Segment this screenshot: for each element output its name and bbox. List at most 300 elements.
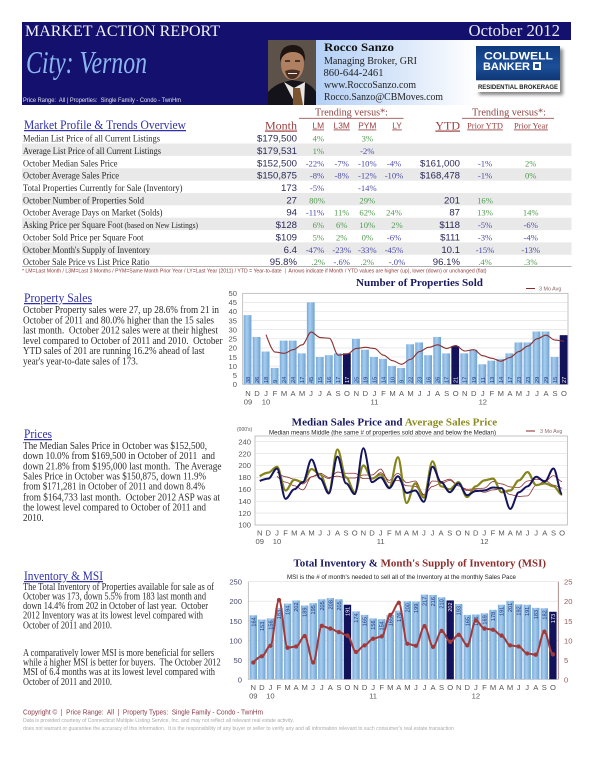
row: months supply: October Month's Supply of Inventory — [23, 245, 150, 256]
y axis labels — [238, 437, 251, 530]
legend: 3 month average — [526, 286, 561, 292]
row: months supply: -33% — [358, 245, 377, 255]
row: days on market: 24% — [386, 208, 402, 218]
body text: October of 2011 and 2010. — [23, 677, 112, 688]
column headers: Trending versus*: — [315, 108, 388, 118]
bar value labels: 21 — [454, 377, 460, 383]
row: median sales price: $161,000 — [420, 158, 460, 169]
price range note: Price Range: All | Properties: Single Family - Condo - TwnHm — [23, 98, 181, 104]
panel: market profile table — [22, 108, 572, 274]
y axis labels: 45 — [229, 298, 237, 307]
bar value labels: 178 — [491, 612, 497, 621]
row: days on market — [23, 208, 539, 219]
row: asking price per square foot: 2% — [391, 220, 403, 230]
x axis labels — [249, 683, 556, 700]
body text: last month. October 2012 sales were at their highest — [23, 326, 218, 336]
row: asking price per square foot: $128 — [276, 220, 297, 231]
bars — [243, 302, 568, 384]
column headers: LM — [312, 120, 324, 130]
x axis labels: 09 — [244, 398, 252, 406]
bar value labels: 165 — [363, 617, 369, 626]
row: inventory — [23, 183, 377, 194]
x axis labels: 11 — [377, 537, 385, 546]
icon: Coldwell Banker logo — [476, 46, 563, 95]
row: months supply: -23% — [332, 245, 351, 255]
row: asking price per square foot: $118 — [439, 220, 460, 231]
row: asking price per square foot: 6% — [336, 220, 347, 230]
row: sold price per square foot: $109 — [276, 232, 297, 243]
icon: Coldwell Banker logo: BANKER — [483, 61, 530, 73]
icon: Coldwell Banker logo: COLDWELL — [484, 50, 553, 62]
row: properties sold: October Number of Properties Sold — [23, 195, 144, 206]
row: average sales price: $150,875 — [257, 171, 297, 182]
bar value labels: 29 — [535, 377, 541, 383]
body text: The Median Sales Price in October was $152,500, — [23, 441, 207, 452]
bar value labels: 17 — [336, 377, 342, 383]
bar value labels: 19 — [363, 377, 369, 383]
y axis labels: 10 — [229, 362, 237, 371]
bar value labels: 26 — [436, 377, 442, 383]
x axis labels: 12 — [472, 692, 480, 700]
report date: October 2012 — [468, 21, 560, 40]
row: average list price: $179,531 — [257, 146, 297, 157]
row: months supply: -45% — [385, 245, 403, 255]
bar value labels: 165 — [465, 617, 471, 626]
line chart: median and average sales price — [237, 418, 567, 546]
bar value labels: 26 — [255, 377, 261, 383]
y axis labels: 200 — [238, 461, 251, 470]
bar value labels: 17 — [445, 377, 451, 383]
bar value labels: 205 — [337, 601, 343, 611]
line: months supply of inventory — [251, 598, 555, 665]
bar value labels: 189 — [303, 608, 309, 617]
y axis labels: 120 — [238, 509, 251, 518]
bar value labels: 23 — [517, 377, 523, 383]
y axis labels — [229, 289, 237, 389]
bar value labels: 23 — [526, 377, 532, 383]
bar value labels: 191 — [525, 607, 531, 616]
x axis labels — [255, 528, 565, 546]
row: properties sold: 80% — [309, 195, 325, 205]
bar value labels: 164 — [251, 617, 257, 627]
bar value labels: 11 — [481, 377, 487, 383]
column headers: Month — [265, 118, 297, 132]
bar value labels: 191 — [346, 607, 352, 616]
row: inventory: Total Properties Currently for Sale (Inventory) — [23, 183, 182, 194]
y axis labels: 140 — [238, 497, 251, 506]
row: sale vs list ratio — [23, 257, 538, 268]
row: days on market: 94 — [286, 208, 298, 219]
row: months supply — [23, 245, 540, 256]
row: sold price per square foot: -6% — [387, 232, 401, 242]
x axis labels: 11 — [370, 398, 378, 406]
title: MARKET ACTION REPORT — [25, 23, 220, 40]
right y axis labels: 20 — [564, 597, 572, 606]
bar value labels: 156 — [268, 620, 274, 630]
body text: The Total Inventory of Properties available for sale as of — [23, 582, 215, 593]
line: average 3 month average — [277, 472, 562, 495]
row: days on market: 11% — [334, 208, 349, 218]
right y axis labels — [564, 578, 572, 684]
table footnote: * LM=Last Month / L3M=Last 3 Months / PYM=Same Month Prior Year / LY=Last Year (2011) / YTD = Year-to-date | Arrows indicate if Month / YTD values are higher (up), lower (down) or unchanged (flat) — [22, 268, 487, 274]
panel: prices text — [23, 427, 222, 524]
row: median sales price: 2% — [525, 158, 536, 168]
left y axis labels: 200 — [229, 597, 242, 606]
row: sold price per square foot: October Sold Price per Square Foot — [23, 232, 144, 243]
row: median sales price: -4% — [387, 158, 401, 168]
y axis labels: 5 — [233, 371, 237, 380]
body text: 2010. — [23, 513, 44, 524]
column headers: LY — [392, 120, 402, 130]
y axis labels: 50 — [229, 289, 237, 298]
right y axis labels: 10 — [564, 636, 572, 645]
chart title: Total Inventory & Month's Supply of Inventory (MSI) — [294, 558, 547, 570]
disclaimer line two: does not warrant or guarantee the accuracy of this information. It is the responsibility of any buyer or seller to verify any and all information relevant to such consumer's real estate transaction — [23, 726, 454, 732]
body text: October Property sales were 27, up 28.6% from 21 in — [23, 305, 219, 316]
bar value labels: 13 — [490, 377, 496, 383]
y axis labels: 25 — [229, 335, 237, 344]
x axis labels: NDJFMAMJJASONDJFMAMJJASONDJFMAMJJASO — [257, 528, 565, 538]
bar value labels: 217 — [422, 597, 428, 606]
bar value labels: 17 — [345, 377, 351, 383]
x axis labels: 12 — [480, 537, 489, 546]
chart title: Number of Properties Sold — [356, 278, 483, 289]
x axis labels: 11 — [369, 692, 377, 700]
bar value labels: 17 — [300, 377, 306, 383]
row: sale vs list ratio: .4% — [478, 257, 492, 267]
bar value labels: 15 — [318, 377, 324, 383]
bar value labels: 173 — [551, 614, 557, 623]
row: average sales price: -1% — [478, 171, 492, 181]
body text — [23, 582, 221, 688]
bar value labels: 183 — [277, 610, 283, 619]
row: average sales price: $168,478 — [420, 171, 460, 182]
bar value labels: 193 — [457, 606, 463, 615]
row: sold price per square foot: $111 — [440, 232, 460, 243]
row: sold price per square foot: -4% — [524, 232, 538, 242]
bar value labels: 195 — [311, 605, 317, 615]
bar value labels: 9 — [400, 380, 406, 383]
row: asking price per square foot: -5% — [478, 220, 492, 230]
bar value labels: 15 — [553, 377, 559, 383]
body text: MSI of 6.4 months was at its lowest level compared with — [23, 667, 215, 678]
row: months supply: 6.4 — [284, 245, 298, 256]
body text: level compared to October of 2011 and 2010. October — [23, 336, 223, 347]
row: median sales price: $152,500 — [257, 158, 297, 169]
column headers: Trending versus*: — [472, 108, 546, 118]
bar value labels: 191 — [500, 607, 506, 616]
bar value labels: 210 — [440, 599, 446, 609]
bar value labels: 176 — [397, 613, 403, 622]
y axis labels: 0 — [233, 380, 237, 389]
row: asking price per square foot: 10% — [359, 220, 375, 230]
x axis labels: 09 — [249, 692, 258, 700]
row: median list price: $179,500 — [257, 134, 297, 144]
row: properties sold: 16% — [477, 195, 493, 205]
combo chart: inventory and months supply — [229, 558, 572, 700]
row: sold price per square foot: 5% — [313, 232, 324, 242]
body text: 2012 Inventory was at its lowest level compared with — [23, 611, 203, 622]
right y axis labels: 15 — [564, 617, 572, 626]
bar value labels: 192 — [517, 606, 523, 616]
bar value labels: 182 — [542, 610, 548, 620]
legend: 3 month average: 3 Mo Avg — [540, 429, 562, 435]
line: median 3 month average — [277, 469, 562, 496]
row: median sales price: -10% — [358, 158, 377, 168]
bar value labels: 201 — [508, 603, 514, 612]
row: sold price per square foot: 2% — [336, 232, 347, 242]
bar value labels: 38 — [246, 377, 252, 383]
bar value labels: 16 — [327, 377, 333, 383]
bar value labels: 17 — [508, 377, 514, 383]
row: sale vs list ratio: .2% — [360, 257, 374, 267]
legend: 3 month average — [526, 429, 562, 435]
left y axis labels: 0 — [238, 675, 242, 684]
row: median sales price: -22% — [306, 158, 324, 168]
bar value labels: 25 — [354, 377, 360, 383]
row: asking price per square foot — [23, 220, 538, 231]
row: inventory: 173 — [281, 183, 297, 194]
icon: Coldwell Banker logo: RESIDENTIAL BROKERAGE — [478, 84, 558, 91]
body text — [23, 441, 222, 524]
y axis labels: 40 — [229, 307, 237, 316]
left y axis labels — [229, 578, 242, 684]
legend: 3 month average: 3 Mo Avg — [539, 286, 561, 292]
disclaimer line one: Data is provided courtesy of Connecticut Multiple Listing Service, Inc. and may not reflect all relevant real estate activity. — [23, 718, 294, 724]
row: average sales price: October Average Sales Price — [23, 171, 120, 182]
heading: Prices — [24, 427, 52, 441]
agent photo — [268, 40, 316, 105]
y axis labels: 180 — [238, 473, 251, 482]
row: median list price: 4% — [313, 134, 324, 144]
row: sale vs list ratio: .2% — [311, 257, 325, 267]
column headers: Prior YTD — [467, 122, 503, 130]
x axis labels: 09 — [255, 537, 264, 546]
column headers: YTD — [435, 118, 460, 132]
bar value labels: 23 — [418, 377, 424, 383]
footer — [23, 708, 454, 732]
row: sold price per square foot: 0% — [362, 232, 373, 242]
row: days on market: 87 — [449, 208, 460, 219]
right y axis labels: 25 — [564, 578, 572, 587]
body text: down 14.4% from 202 in October of last year. October — [23, 601, 208, 612]
row: inventory: -5% — [310, 183, 324, 193]
row: days on market: 14% — [523, 208, 539, 218]
chart subtitle: MSI is the # of month's needed to sell all of the Inventory at the monthly Sales Pace — [287, 574, 517, 581]
row: days on market: 62% — [359, 208, 375, 218]
panel: inventory text — [23, 569, 221, 688]
body text: YTD sales of 201 are running 16.2% ahead of last — [23, 346, 205, 357]
body text: from $171,281 in October of 2011 and down 8.4% — [23, 482, 205, 493]
body text: while a higher MSI is better for buyers. The October 2012 — [23, 657, 221, 668]
phone: 860-644-2461 — [324, 68, 384, 79]
bar value labels: 14 — [381, 377, 387, 383]
table heading: Market Profile & Trends Overview — [24, 118, 186, 132]
bar value labels — [251, 597, 557, 631]
row: median list price: 3% — [362, 134, 373, 144]
row: median sales price: -1% — [478, 158, 492, 168]
row: asking price per square foot: 6% — [313, 220, 324, 230]
bar value labels: 166 — [474, 616, 480, 626]
bar value labels: 200 — [405, 603, 411, 613]
row: average sales price — [23, 171, 536, 182]
body text: the lowest level compared to October of 2011 and — [23, 503, 206, 514]
row: average list price: 1% — [313, 146, 324, 156]
column headers: L3M — [334, 120, 350, 130]
row: average sales price: -10% — [385, 171, 403, 181]
x axis labels: NDJFMAMJJASONDJFMAMJJASONDJFMAMJJASO — [245, 389, 567, 398]
body text — [23, 305, 223, 368]
bar value labels: 18 — [264, 377, 270, 383]
column headers: Prior Year — [514, 122, 548, 130]
row: sale vs list ratio: October Sale Price vs List Price Ratio — [23, 257, 150, 268]
row: properties sold: 201 — [444, 195, 460, 206]
row: average sales price: -12% — [358, 171, 377, 181]
row: median list price — [23, 134, 373, 144]
body text: down 10.0% from $169,500 in October of 2011 and — [23, 451, 215, 462]
bar value labels: 154 — [380, 621, 386, 631]
row: months supply: -13% — [521, 245, 540, 255]
x axis labels: 10 — [262, 398, 270, 406]
row: sale vs list ratio: 95.8% — [270, 257, 297, 268]
y axis labels: 240 — [238, 437, 251, 446]
bar value labels: 16 — [427, 377, 433, 383]
row: days on market: 13% — [477, 208, 493, 218]
column headers: PYM — [358, 120, 376, 130]
body text: year's year-to-date sales of 173. — [23, 356, 138, 368]
row: median sales price: October Median Sales Price — [23, 158, 118, 169]
bar value labels: 169 — [482, 615, 488, 625]
x axis labels — [244, 389, 567, 406]
body text: October of 2011 and 80.0% higher than the 15 sales — [23, 315, 214, 326]
body text: October was 173, down 5.5% from 183 last month and — [23, 591, 206, 602]
row: sale vs list ratio: .3% — [524, 257, 538, 267]
y axis labels: 100 — [238, 521, 251, 530]
agent title: Managing Broker, GRI — [324, 56, 417, 67]
row: average list price: -2% — [360, 146, 374, 156]
bar value labels: 153 — [260, 622, 266, 631]
y axis labels: 160 — [238, 485, 251, 494]
bar value labels: 17 — [463, 377, 469, 383]
header banner — [22, 21, 571, 105]
row: average sales price: 0% — [525, 171, 536, 181]
row: median sales price: -7% — [335, 158, 349, 168]
x axis labels: 10 — [266, 692, 275, 700]
heading: Inventory & MSI — [24, 569, 103, 583]
bar value labels: 29 — [544, 377, 550, 383]
row: asking price per square foot: Asking Price per Square Foot — [23, 220, 123, 231]
bar value labels: 45 — [309, 377, 315, 383]
agent contact card — [316, 40, 476, 105]
row: properties sold: 29% — [359, 195, 375, 205]
y axis labels: 35 — [229, 316, 237, 325]
bar value labels: 27 — [562, 377, 568, 383]
row: median list price: Median List Price of all Current Listings — [23, 134, 160, 144]
copyright line: Copyright © | Price Range: All | Property Types: Single Family - Condo - TwnHm — [23, 708, 263, 716]
left y axis labels: 100 — [229, 636, 242, 645]
agent name: Rocco Sanzo — [324, 42, 394, 54]
body text: from $164,733 last month. October 2012 ASP was at — [23, 492, 220, 503]
x axis labels: NDJFMAMJJASONDJFMAMJJASONDJFMAMJJASO — [251, 683, 556, 692]
chart subtitle: Median means Middle (the same # of properties sold above and below the Median) — [269, 431, 496, 437]
row: sale vs list ratio: 96.1% — [433, 257, 460, 268]
bar value labels: 199 — [414, 604, 420, 613]
left y axis labels: 50 — [234, 656, 242, 665]
bar value labels: 208 — [328, 600, 334, 609]
axis unit: (000's) — [237, 427, 252, 433]
bar value labels: 24 — [291, 377, 297, 383]
bar value labels: 174 — [354, 613, 360, 623]
left y axis labels: 250 — [229, 578, 242, 587]
row: properties sold: 27 — [286, 195, 297, 206]
row: sale vs list ratio: -.0% — [389, 257, 405, 267]
bar value labels: 10 — [390, 377, 396, 383]
row: months supply: -15% — [476, 245, 494, 255]
row: average list price — [23, 146, 374, 157]
bar value labels: 183 — [534, 610, 540, 619]
x axis labels: 10 — [273, 537, 281, 546]
email: Rocco.Sanzo@CBMoves.com — [324, 92, 443, 103]
row: inventory: -14% — [358, 183, 377, 193]
bar value labels: 202 — [448, 602, 454, 612]
row: sold price per square foot: -3% — [478, 232, 492, 242]
right y axis labels: 0 — [564, 675, 568, 684]
column headers — [265, 108, 548, 132]
panel: property sales text — [23, 291, 223, 368]
chart title: Median Sales Price and Average Sales Price — [292, 418, 498, 428]
line: average sales price — [260, 449, 562, 503]
y axis labels: 220 — [238, 449, 251, 458]
bar value labels: 15 — [372, 377, 378, 383]
row: sold price per square foot — [23, 232, 538, 243]
website: www.RoccoSanzo.com — [324, 80, 416, 91]
bar value labels: 202 — [294, 602, 300, 612]
body text: October of 2011 and 2010. — [23, 620, 112, 631]
bar value labels: 205 — [320, 601, 326, 611]
row: average sales price: -8% — [310, 171, 324, 181]
line: 3 month average — [266, 332, 564, 364]
bar value labels: 194 — [286, 606, 292, 615]
row: months supply: 10.1 — [441, 245, 460, 256]
bar value labels: 9 — [273, 380, 279, 383]
heading: Property Sales — [24, 291, 92, 305]
row: average list price: Average List Price of all Current Listings — [23, 146, 161, 157]
row: days on market: October Average Days on Market (Solds) — [23, 208, 162, 219]
row: average sales price: -8% — [335, 171, 349, 181]
y axis labels: 30 — [229, 326, 237, 334]
city name: City: Vernon — [26, 44, 147, 80]
bar value labels — [246, 377, 568, 383]
body text: A comparatively lower MSI is more beneficial for sellers — [23, 648, 214, 659]
bar value labels: 165 — [388, 617, 394, 626]
row: properties sold — [23, 195, 493, 206]
row: asking price per square foot: -6% — [524, 220, 538, 230]
bar value labels: 19 — [472, 377, 478, 383]
bar value labels: 156 — [371, 620, 377, 630]
body text: Sales Price in October was $150,875, down 11.9% — [23, 472, 206, 483]
x axis labels: 12 — [479, 398, 487, 406]
body text: down 21.8% from $195,000 last month. The Average — [23, 461, 222, 472]
right y axis labels: 5 — [564, 656, 568, 665]
left y axis labels: 150 — [229, 617, 242, 626]
row: days on market: -11% — [306, 208, 324, 218]
bar value labels: 24 — [282, 377, 288, 383]
row: asking price per square foot: (based on New Listings) — [124, 221, 198, 230]
bar value labels: 22 — [408, 377, 414, 383]
inventory bars — [250, 595, 557, 679]
row: sale vs list ratio: -.6% — [333, 257, 350, 267]
line: median sales price — [260, 448, 562, 509]
